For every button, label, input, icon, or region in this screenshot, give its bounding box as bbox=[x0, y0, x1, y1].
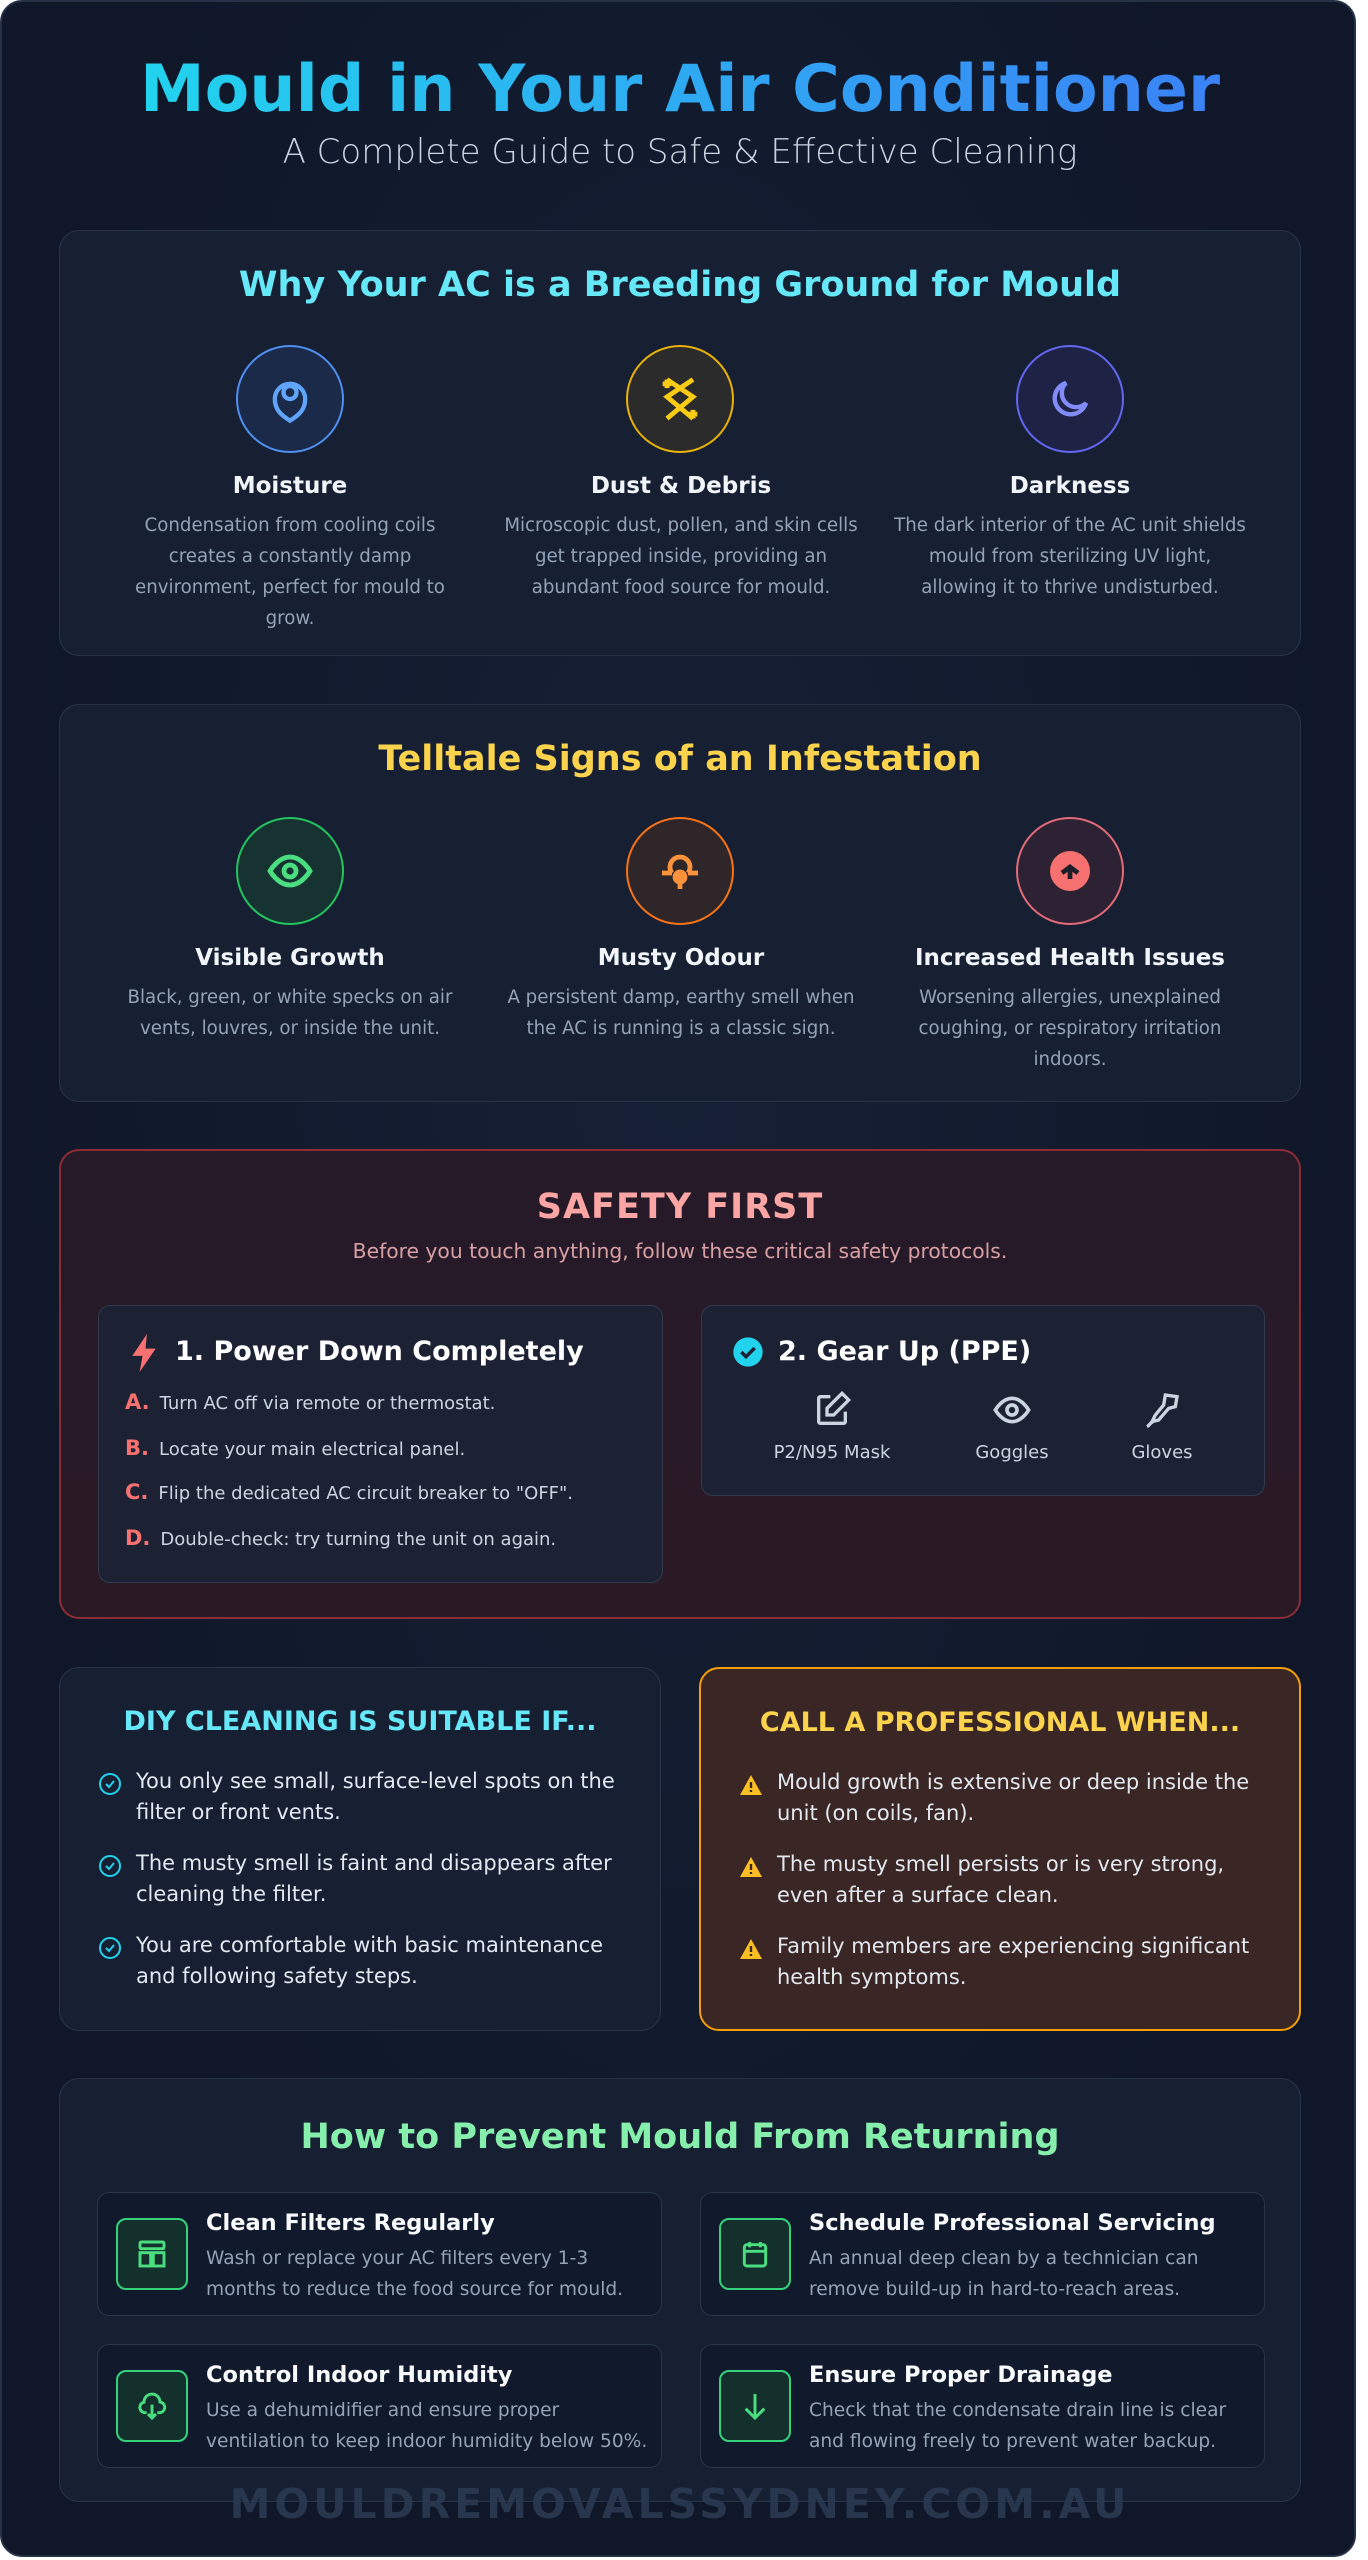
card: servicing: Schedule Professional Servicing bbox=[809, 2210, 1216, 2236]
icon bbox=[116, 2218, 188, 2290]
subtitle: Before you touch anything, follow these critical safety protocols. bbox=[353, 1239, 1007, 1263]
step B: B. Locate your main electrical panel. bbox=[125, 1436, 465, 1460]
text: Worsening allergies, unexplained coughing, or respiratory irritation indoors. bbox=[919, 987, 1221, 1070]
card: servicing bbox=[700, 2192, 1265, 2316]
icon bbox=[719, 2218, 791, 2290]
heading: Telltale Signs of an Infestation bbox=[378, 739, 982, 779]
heading: Why Your AC is a Breeding Ground for Mould bbox=[239, 265, 1121, 305]
text: Black, green, or white specks on air vents, louvres, or inside the unit. bbox=[128, 987, 452, 1039]
ppe: mask: P2/N95 Mask bbox=[774, 1442, 890, 1463]
label: moisture: Moisture bbox=[233, 473, 347, 499]
card: servicing: An annual deep clean by a technician can remove build-up in hard-to-reach areas. bbox=[809, 2248, 1199, 2300]
icon: check bbox=[733, 1337, 763, 1367]
panel: diy suitable bbox=[59, 1667, 661, 2031]
card: drainage: Ensure Proper Drainage bbox=[809, 2362, 1113, 2388]
label: darkness: Darkness bbox=[1010, 473, 1130, 499]
ppe: gloves: Gloves bbox=[1131, 1442, 1193, 1463]
step D: D. Double-check: try turning the unit on again. bbox=[125, 1526, 556, 1550]
box: power down bbox=[98, 1305, 663, 1583]
text: A persistent damp, earthy smell when the AC is running is a classic sign. bbox=[507, 987, 855, 1039]
card: humidity: Control Indoor Humidity bbox=[206, 2362, 512, 2388]
panel: why breeding ground bbox=[59, 230, 1301, 656]
icon: dust bbox=[626, 345, 734, 453]
item 2: The musty smell persists or is very strong, even after a surface clean. bbox=[777, 1852, 1224, 1907]
text: moisture: Condensation from cooling coils creates a constantly damp environment, perfect for mould to grow. bbox=[135, 515, 445, 629]
ppe: goggles: Goggles bbox=[975, 1442, 1049, 1463]
watermark: MOULDREMOVALSSYDNEY.COM.AU bbox=[230, 2480, 1130, 2528]
card: clean filters: Clean Filters Regularly bbox=[206, 2210, 495, 2236]
item 2: The musty smell is faint and disappears after cleaning the filter. bbox=[136, 1851, 612, 1906]
icon: bolt bbox=[132, 1334, 156, 1372]
panel: call a professional bbox=[699, 1667, 1301, 2031]
heading: CALL A PROFESSIONAL WHEN... bbox=[760, 1707, 1240, 1738]
label: Increased Health Issues bbox=[915, 945, 1225, 971]
icon: eye bbox=[236, 817, 344, 925]
ppe: gloves bbox=[1131, 1393, 1193, 1463]
card: drainage: Check that the condensate drain line is clear and flowing freely to prevent water backup. bbox=[809, 2400, 1226, 2452]
card: clean filters: Wash or replace your AC filters every 1-3 months to reduce the food source for mould. bbox=[206, 2248, 623, 2300]
icon bbox=[116, 2370, 188, 2442]
heading: How to Prevent Mould From Returning bbox=[300, 2117, 1060, 2157]
text: darkness: The dark interior of the AC unit shields mould from sterilizing UV light, allowing it to thrive undisturbed. bbox=[894, 515, 1246, 598]
item 3: Family members are experiencing significant health symptoms. bbox=[777, 1934, 1249, 1989]
icon: health bbox=[1016, 817, 1124, 925]
icon bbox=[719, 2370, 791, 2442]
heading: DIY CLEANING IS SUITABLE IF... bbox=[123, 1706, 596, 1737]
label: Visible Growth bbox=[195, 945, 385, 971]
panel: prevention bbox=[59, 2078, 1301, 2502]
panel: telltale signs bbox=[59, 704, 1301, 1102]
card: humidity: Use a dehumidifier and ensure proper ventilation to keep indoor humidity below 50%. bbox=[206, 2400, 647, 2452]
box heading: 1. Power Down Completely bbox=[175, 1336, 584, 1367]
text: dust: Microscopic dust, pollen, and skin cells get trapped inside, providing an abundant food source for mould. bbox=[504, 515, 858, 598]
item 3: You are comfortable with basic maintenance and following safety steps. bbox=[136, 1933, 603, 1988]
ppe: mask bbox=[774, 1391, 890, 1463]
label: Musty Odour bbox=[598, 945, 764, 971]
icon: darkness bbox=[1016, 345, 1124, 453]
icon: odour bbox=[626, 817, 734, 925]
step A: A. Turn AC off via remote or thermostat. bbox=[125, 1390, 495, 1414]
item 1: Mould growth is extensive or deep inside the unit (on coils, fan). bbox=[777, 1770, 1249, 1825]
item 1: You only see small, surface-level spots on the filter or front vents. bbox=[136, 1769, 615, 1824]
card: drainage bbox=[700, 2344, 1265, 2468]
label: dust: Dust & Debris bbox=[591, 473, 771, 499]
subtitle: A Complete Guide to Safe & Effective Cleaning bbox=[283, 132, 1077, 172]
card: humidity bbox=[97, 2344, 662, 2468]
box: gear up bbox=[701, 1305, 1265, 1496]
heading: SAFETY FIRST bbox=[537, 1187, 823, 1227]
card: clean filters bbox=[97, 2192, 662, 2316]
title: Mould in Your Air Conditioner bbox=[140, 52, 1220, 127]
ppe: goggles bbox=[975, 1396, 1049, 1463]
step C: C. Flip the dedicated AC circuit breaker to "OFF". bbox=[125, 1480, 573, 1504]
box heading: 2. Gear Up (PPE) bbox=[778, 1336, 1031, 1367]
icon: moisture bbox=[236, 345, 344, 453]
panel: safety first bbox=[59, 1149, 1301, 1619]
